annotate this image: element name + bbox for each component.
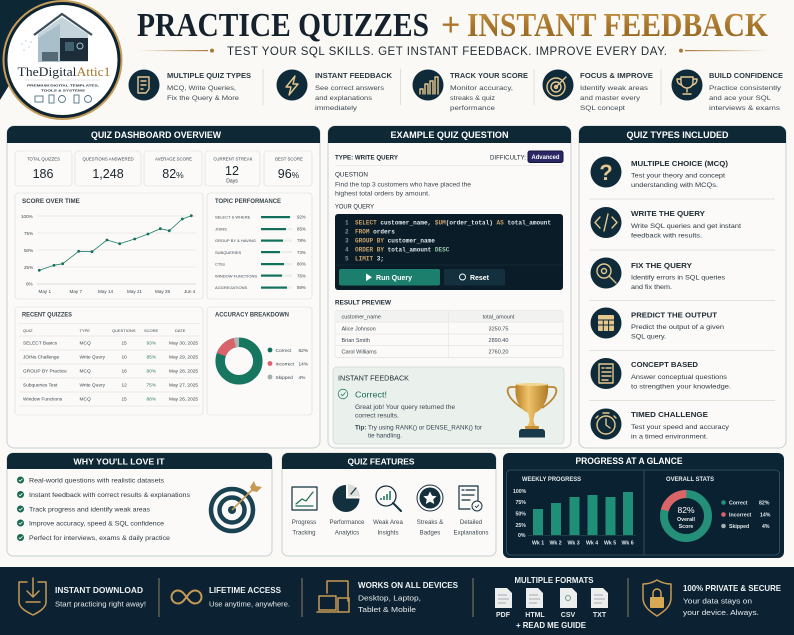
subtitle: TEST YOUR SQL SKILLS. GET INSTANT FEEDBACK. IMPROVE EVERY DAY.	[227, 46, 667, 58]
title	[137, 7, 768, 44]
table: recent quizzes: 85%	[146, 354, 157, 360]
chart: accuracy breakdown	[207, 307, 312, 415]
stat: total quizzes: TOTAL QUIZZES	[27, 156, 60, 162]
code editor: GROUP BY customer_name	[355, 238, 435, 244]
table: recent quizzes: Write Query	[80, 354, 106, 360]
type: write the query: feedback with results.	[631, 232, 702, 240]
callout: instant feedback: correct results.	[355, 412, 399, 420]
table: recent quizzes: QUESTIONS	[112, 328, 136, 333]
heading: example question: EXAMPLE QUIZ QUESTION	[390, 130, 509, 140]
table: result preview: 3250.75	[489, 326, 508, 332]
question type and difficulty	[335, 151, 563, 162]
type: write the query: Write SQL queries and get instant	[631, 223, 741, 230]
type: timed challenge: Test your speed and accuracy	[631, 424, 730, 431]
benefits list: Perfect for interviews, exams & daily practice	[29, 535, 170, 542]
type: multiple choice: ?	[599, 160, 613, 185]
footer: multiple formats: TXT	[593, 612, 607, 619]
chart: weekly progress: 100%	[513, 489, 527, 495]
chart: score over time: May 14	[98, 289, 114, 294]
chart: overall stats: Incorrect	[729, 512, 751, 518]
chart: score over time: May 21	[127, 289, 143, 294]
footer: works on all devices: WORKS ON ALL DEVICES	[358, 581, 459, 590]
table: recent quizzes: 15	[122, 396, 127, 402]
footer: works on all devices: Tablet & Mobile	[358, 605, 416, 614]
type: predict the output: PREDICT THE OUTPUT	[631, 310, 717, 320]
table: recent quizzes: SCORE	[144, 328, 159, 333]
benefit: build confidence: and ace your SQL	[709, 95, 771, 102]
benefit: build confidence: Practice consistently	[709, 85, 782, 92]
chart: accuracy breakdown: Correct	[276, 348, 292, 354]
table: recent quizzes: MCQ	[80, 396, 91, 402]
callout: instant feedback: tie handling.	[368, 432, 402, 440]
table: recent quizzes: MCQ	[80, 368, 91, 374]
question type and difficulty: TYPE: WRITE QUERY	[335, 154, 399, 162]
type: fix the query	[590, 258, 726, 291]
chart: topic performance	[207, 193, 312, 299]
chart: weekly progress: Wk 1	[532, 540, 544, 546]
heading: dashboard: QUIZ DASHBOARD OVERVIEW	[91, 130, 221, 140]
chart: score over time: 100%	[21, 214, 33, 219]
footer: works on all devices	[317, 581, 459, 614]
table: recent quizzes: May 27, 2025	[169, 382, 198, 388]
callout: instant feedback	[333, 367, 564, 444]
table: recent quizzes: Window Functions	[23, 396, 63, 402]
stat: average score: 82%	[162, 167, 184, 181]
chart: score over time: 75%	[24, 231, 33, 236]
chart: overall stats: Overall	[677, 517, 696, 523]
table: recent quizzes: QUIZ	[23, 328, 33, 333]
footer: multiple formats: MULTIPLE FORMATS	[514, 576, 594, 585]
code editor: SELECT customer_name, $UM(order_total) AS total_amount	[355, 220, 551, 226]
feature: performance analytics	[330, 484, 365, 536]
footer: instant download	[19, 578, 146, 615]
table: recent quizzes: May 26, 2025	[169, 396, 198, 402]
callout: instant feedback: Great job! Your query returned the	[355, 404, 455, 411]
panel: example quiz question	[328, 126, 571, 448]
chart: overall stats: 82%	[677, 505, 695, 515]
type: multiple choice: MULTIPLE CHOICE (MCQ)	[631, 159, 729, 168]
button: run query: Run Query	[376, 273, 413, 282]
table: result preview: Carol Williams	[342, 350, 377, 356]
feature: detailed explanations: Detailed	[460, 519, 482, 526]
code editor: LIMIT 3;	[355, 256, 384, 262]
panel: quiz types included	[579, 126, 786, 448]
chart: topic performance: WINDOW FUNCTIONS	[215, 274, 257, 278]
benefits list: Instant feedback with correct results & explanations	[29, 492, 191, 499]
table: recent quizzes	[15, 307, 203, 415]
footer: multiple formats: PDF	[496, 612, 511, 619]
type: timed challenge: in a timed environment.	[631, 434, 708, 440]
footer: multiple formats: CSV	[561, 612, 576, 619]
benefit: focus and improve: FOCUS & IMPROVE	[580, 71, 653, 80]
chart: weekly progress: 0%	[518, 533, 526, 539]
benefit: track your score	[412, 70, 528, 112]
table: result preview: RESULT PREVIEW	[335, 300, 392, 306]
chart: score over time: May 7	[70, 289, 82, 294]
benefit: track your score: Monitor accuracy,	[450, 85, 513, 92]
table: recent quizzes: 75%	[146, 382, 157, 388]
button: run query	[339, 269, 440, 286]
callout: instant feedback: Correct!	[355, 390, 387, 400]
chart: accuracy breakdown: 14%	[298, 362, 309, 368]
stat: questions answered	[75, 151, 141, 186]
table: recent quizzes: DATE	[175, 328, 186, 333]
panel: progress at a glance	[503, 453, 784, 558]
benefit: build confidence	[672, 70, 783, 112]
button: reset: Reset	[470, 273, 489, 282]
title: PRACTICE QUIZZES	[137, 7, 429, 44]
benefit: multiple quiz types	[128, 70, 251, 102]
footer: lifetime access: Use anytime, anywhere.	[209, 600, 290, 608]
chart: weekly progress: Wk 4	[586, 540, 598, 546]
chart: topic performance: 80%	[297, 262, 306, 267]
heading: progress: PROGRESS AT A GLANCE	[576, 456, 682, 466]
chart: topic performance: AGGREGATIONS	[215, 285, 247, 290]
table: recent quizzes: JOINs Challenge	[23, 354, 60, 360]
logo badge	[0, 0, 122, 120]
button: reset	[444, 269, 505, 286]
type: predict the output: Predict the output of a given	[631, 324, 724, 331]
type: concept based: to strengthen your knowledge.	[631, 384, 731, 390]
chart: overall stats: Score	[679, 524, 693, 530]
table: recent quizzes: 16	[122, 368, 127, 374]
feature: streaks and badges: Badges	[420, 530, 440, 536]
chart: score over time: 50%	[24, 248, 33, 253]
chart: score over time: May 1	[38, 289, 51, 294]
table: recent quizzes: 88%	[146, 396, 157, 402]
callout: instant feedback: Tip: Try using RANK() or DENSE_RANK() for	[355, 424, 483, 432]
chart: accuracy breakdown: ACCURACY BREAKDOWN	[215, 312, 289, 318]
logo badge: TOOLS & SYSTEMS	[41, 88, 85, 92]
table: result preview	[335, 300, 563, 358]
table: result preview: Brian Smith	[342, 338, 370, 344]
benefit: multiple quiz types: Fix the Query & More	[167, 95, 239, 102]
type: multiple choice	[590, 156, 729, 189]
stat: total quizzes: 186	[33, 167, 53, 181]
feature: performance analytics: Analytics	[335, 530, 359, 536]
chart: weekly progress: 50%	[516, 512, 526, 518]
type: timed challenge	[590, 408, 730, 440]
code editor: 4	[345, 246, 349, 254]
chart: topic performance: JOINS	[215, 226, 227, 232]
icon: target with arrow	[211, 481, 262, 531]
benefit: track your score: streaks & quiz	[450, 95, 495, 102]
heading: quiz types: QUIZ TYPES INCLUDED	[626, 130, 729, 140]
type: fix the query: and fix them.	[631, 284, 672, 291]
benefit: instant feedback: and explanations	[315, 95, 373, 102]
table: recent quizzes: 12	[122, 382, 127, 388]
feature: weak area insights: Insights	[377, 530, 399, 536]
chart: topic performance: GROUP BY & HAVING	[215, 238, 256, 243]
stat: best score: BEST SCORE	[275, 156, 303, 162]
code editor: 1	[345, 220, 349, 226]
chart: weekly progress	[513, 476, 636, 546]
benefit: multiple quiz types: MULTIPLE QUIZ TYPES	[167, 71, 251, 80]
footer: private and secure: Your data stays on	[683, 596, 752, 606]
table: recent quizzes: May 30, 2025	[169, 340, 198, 346]
feature: detailed explanations	[454, 486, 488, 536]
stat: questions answered: QUESTIONS ANSWERED	[82, 156, 134, 162]
chart: overall stats	[659, 476, 771, 543]
chart: overall stats: 14%	[760, 512, 771, 518]
table: recent quizzes: 15	[122, 340, 127, 346]
footer: private and secure: your device. Always.	[683, 608, 759, 617]
panel: quiz dashboard overview	[7, 126, 320, 448]
chart: topic performance: 76%	[297, 274, 306, 279]
stat: current streak: CURRENT STREAK	[213, 156, 253, 162]
feature: detailed explanations: Explanations	[454, 530, 488, 536]
chart: weekly progress: 75%	[516, 500, 526, 506]
table: recent quizzes: Write Query	[80, 382, 106, 388]
question text: Find the top 3 customers who have placed the	[335, 182, 471, 188]
feature: performance analytics: Performance	[330, 519, 365, 526]
stat: best score	[264, 151, 312, 186]
chart: score over time: 25%	[24, 265, 33, 270]
table: result preview: customer_name	[342, 314, 381, 320]
question text: YOUR QUERY	[335, 204, 375, 210]
stat: total quizzes	[15, 151, 72, 186]
table: recent quizzes: Subqueries Test	[23, 382, 58, 388]
chart: score over time	[15, 193, 203, 299]
type: multiple choice: Test your theory and concept	[631, 172, 725, 180]
type: concept based: Answer conceptual questions	[631, 374, 728, 381]
footer: private and secure	[643, 580, 782, 617]
heading: features: QUIZ FEATURES	[348, 456, 415, 466]
benefits list: Improve accuracy, speed & SQL confidence	[29, 520, 164, 528]
benefit: focus and improve: SQL concept	[580, 105, 625, 112]
chart: overall stats: Correct	[729, 500, 748, 506]
stat: best score: 96%	[278, 167, 300, 181]
table: result preview: 2890.40	[489, 338, 508, 344]
stat: average score	[144, 151, 202, 186]
benefit: focus and improve	[542, 70, 653, 112]
benefit: track your score: performance	[450, 105, 495, 112]
question type and difficulty: Advanced	[532, 155, 560, 161]
chart: overall stats: 82%	[759, 500, 770, 506]
footer band	[0, 567, 794, 635]
type: predict the output	[590, 308, 724, 340]
feature: progress tracking	[292, 487, 317, 536]
chart: topic performance: SUBQUERIES	[215, 250, 242, 255]
chart: accuracy breakdown: 82%	[298, 348, 309, 354]
chart: score over time: May 28	[155, 289, 171, 294]
chart: accuracy breakdown: 4%	[298, 375, 306, 381]
footer: instant download: Start practicing right away!	[55, 600, 146, 608]
code editor	[335, 214, 563, 290]
footer: instant download: INSTANT DOWNLOAD	[55, 586, 143, 595]
code editor: 2	[345, 228, 349, 236]
chart: overall stats: Skipped	[729, 524, 749, 530]
benefit: instant feedback: See correct answers	[315, 85, 385, 92]
chart: weekly progress: 25%	[516, 523, 526, 529]
type: multiple choice: understanding with MCQs.	[631, 182, 718, 189]
benefit: build confidence: BUILD CONFIDENCE	[709, 71, 783, 80]
table: result preview: Alice Johnson	[342, 326, 376, 332]
benefit: build confidence: interviews & exams	[709, 105, 781, 112]
table: recent quizzes: May 28, 2025	[169, 368, 198, 374]
stat: current streak: 12	[225, 164, 239, 178]
chart: topic performance: 85%	[297, 227, 306, 232]
benefit: instant feedback	[276, 70, 393, 112]
benefit: instant feedback: immediately	[315, 105, 358, 112]
table: recent quizzes: May 29, 2025	[169, 354, 198, 360]
chart: weekly progress: WEEKLY PROGRESS	[522, 476, 582, 483]
chart: topic performance: 88%	[297, 285, 306, 290]
footer: multiple formats: + READ ME GUIDE	[516, 621, 587, 630]
stat: current streak: Days	[226, 178, 238, 184]
type: write the query	[590, 207, 741, 240]
question text	[335, 172, 471, 210]
footer: multiple formats	[495, 576, 608, 630]
chart: topic performance: 92%	[297, 215, 306, 220]
chart: topic performance: TOPIC PERFORMANCE	[215, 198, 281, 205]
table: recent quizzes: TYPE	[80, 328, 90, 333]
table: result preview: 2760.20	[489, 350, 508, 356]
stat: current streak	[205, 151, 260, 186]
benefit: instant feedback: INSTANT FEEDBACK	[315, 71, 393, 80]
panel: quiz features	[282, 453, 496, 556]
benefit: multiple quiz types: MCQ, Write Queries,	[167, 85, 236, 92]
feature: progress tracking: Progress	[292, 519, 316, 526]
chart: topic performance: SELECT & WHERE	[215, 214, 251, 220]
footer: works on all devices: Desktop, Laptop,	[358, 594, 421, 602]
footer: multiple formats: HTML	[525, 612, 545, 619]
feature: weak area insights: Weak Area	[373, 519, 403, 526]
question text: highest total orders by amount.	[335, 190, 430, 198]
panel: why you'll love it	[7, 453, 272, 556]
title: +	[441, 7, 460, 44]
chart: weekly progress: Wk 2	[550, 540, 562, 546]
benefit: focus and improve: Identify weak areas	[580, 85, 649, 92]
benefits list	[17, 476, 191, 542]
icon: gold trophy	[508, 383, 556, 438]
chart: topic performance: CTEs	[215, 262, 225, 266]
stat: average score: AVERAGE SCORE	[155, 156, 192, 162]
code editor: FROM orders	[355, 228, 395, 236]
logo badge: TheDigitalAttic1	[18, 64, 110, 79]
type: fix the query: FIX THE QUERY	[631, 261, 692, 270]
benefits list: Track progress and identify weak areas	[29, 506, 151, 514]
logo badge: PREMIUM DIGITAL TEMPLATES,	[27, 84, 99, 88]
footer: lifetime access	[172, 586, 290, 608]
chart: topic performance: 78%	[297, 238, 306, 243]
footer: private and secure: 100% PRIVATE & SECURE	[683, 584, 782, 593]
feature: weak area insights	[373, 486, 403, 536]
chart: score over time: Jun 4	[184, 289, 196, 294]
heading: why: WHY YOU'LL LOVE IT	[74, 456, 165, 466]
feature: progress tracking: Tracking	[292, 530, 316, 536]
code editor: ORDER BY total_amount DESC	[355, 246, 450, 254]
feature: streaks and badges	[417, 485, 443, 536]
code editor: 5	[345, 256, 349, 262]
chart: weekly progress: Wk 3	[568, 540, 580, 546]
type: fix the query: Identify errors in SQL queries	[631, 274, 726, 282]
code editor: 3	[345, 238, 349, 244]
benefit: focus and improve: and master every	[580, 95, 641, 102]
type: concept based: CONCEPT BASED	[631, 360, 699, 369]
callout: instant feedback: INSTANT FEEDBACK	[338, 376, 409, 382]
type: timed challenge: TIMED CHALLENGE	[631, 410, 708, 419]
chart: overall stats: 4%	[762, 524, 770, 530]
chart: accuracy breakdown: Skipped	[276, 375, 293, 381]
table: recent quizzes: 10	[122, 354, 127, 360]
subtitle	[138, 46, 768, 58]
benefits list: Real-world questions with realistic datasets	[29, 478, 165, 484]
chart: overall stats: OVERALL STATS	[666, 476, 715, 483]
stat: questions answered: 1,248	[92, 167, 124, 181]
chart: accuracy breakdown: Incorrect	[276, 362, 295, 368]
chart: weekly progress: Wk 5	[604, 540, 616, 546]
table: recent quizzes: 93%	[146, 340, 157, 346]
table: recent quizzes: MCQ	[80, 340, 91, 346]
question text: QUESTION	[335, 172, 368, 178]
table: recent quizzes: 80%	[146, 368, 157, 374]
type: predict the output: SQL query.	[631, 334, 666, 340]
table: recent quizzes: GROUP BY Practice	[23, 368, 67, 374]
chart: score over time: SCORE OVER TIME	[22, 198, 80, 205]
chart: score over time: 0%	[26, 282, 33, 286]
chart: weekly progress: Wk 6	[622, 540, 634, 546]
type: concept based	[590, 358, 731, 390]
chart: topic performance: 73%	[297, 250, 306, 255]
footer: lifetime access: LIFETIME ACCESS	[209, 586, 282, 595]
table: result preview: total_amount	[483, 314, 515, 320]
feature: streaks and badges: Streaks &	[417, 519, 443, 526]
benefit: track your score: TRACK YOUR SCORE	[450, 71, 528, 80]
type: write the query: WRITE THE QUERY	[631, 209, 705, 218]
table: recent quizzes: RECENT QUIZZES	[22, 312, 72, 318]
question type and difficulty: DIFFICULTY:	[490, 154, 526, 162]
table: recent quizzes: SELECT Basics	[23, 340, 58, 346]
